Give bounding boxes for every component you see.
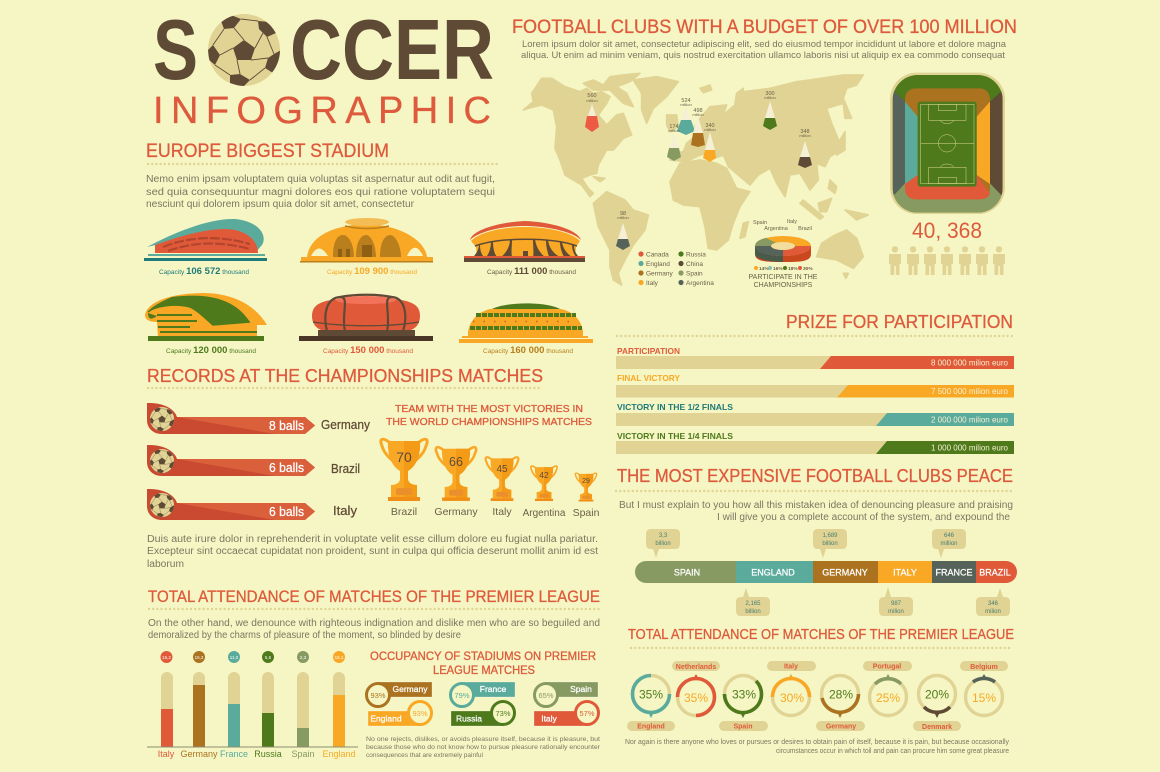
stadium top view <box>890 73 1005 214</box>
stadium: teal and red: Capacity 106 572 thousand <box>159 266 249 277</box>
segmented bar: ITALY <box>893 568 917 578</box>
donut chart: participate in the championships: 30% <box>803 266 813 272</box>
pin: Italy: million <box>704 127 716 132</box>
callout: Brazil <box>976 588 1010 616</box>
callout: Spain: billion <box>655 541 671 547</box>
donut chart: participate in the championships: Italy <box>787 219 797 225</box>
bar chart: 2,3 <box>300 655 307 660</box>
map legend: Italy <box>646 280 659 287</box>
panel: total attendance left: demoralized by the charms of pleasure of the moment, so blinded by desire <box>148 630 461 641</box>
bar chart: 5,5 <box>265 655 272 660</box>
panel: total attendance right: Denmark <box>922 724 952 731</box>
prize bar: 1/2 finals: VICTORY IN THE 1/2 FINALS <box>617 402 733 412</box>
callout: Germany: billion <box>822 541 838 547</box>
record bar: Germany: 8 balls <box>269 418 304 433</box>
occupancy pills: 79% <box>454 691 470 700</box>
map legend: China <box>686 261 703 268</box>
stadium: patterned dome <box>459 303 593 356</box>
stadium: red with ribs <box>299 295 433 356</box>
callout: England: 2,165 <box>745 601 761 607</box>
map legend: Spain <box>686 270 703 278</box>
stadium: red roof and brown columns: Capacity 111 000 thousand <box>487 266 576 277</box>
trophy: Italy <box>486 457 518 518</box>
bar chart: 15,2 <box>162 655 171 660</box>
title: S <box>153 3 198 98</box>
segmented bar <box>635 561 1017 583</box>
callouts <box>646 529 1010 616</box>
prize bar: final victory: FINAL VICTORY <box>617 373 680 383</box>
trophy: Italy: Italy <box>492 506 512 518</box>
panel: Europe biggest stadium: nesciunt qui dolorem ipsum quia dolor sit amet, consectetur <box>146 199 415 210</box>
map pins <box>585 91 812 250</box>
map legend: Russia <box>686 252 706 258</box>
record bar: Brazil <box>147 445 360 476</box>
trophy: Italy: 45 <box>496 464 508 475</box>
occupancy pills <box>366 682 598 726</box>
trophy: Brazil: Brazil <box>391 506 417 518</box>
pin: England: million <box>680 102 692 107</box>
title: INFOGRAPHIC <box>153 90 491 132</box>
record bar: Italy <box>147 489 358 520</box>
segmented bar: ENGLAND <box>751 568 795 578</box>
donut chart: participate in the championships: Argentina <box>764 226 789 232</box>
map legend <box>638 251 714 287</box>
callout: France: 646 <box>944 533 955 539</box>
callout: France <box>932 529 966 558</box>
callout: England <box>736 588 770 616</box>
callout: England: billion <box>745 609 761 615</box>
stadium: green and orange <box>145 293 267 356</box>
stadium: green and orange: Capacity 120 000 thousand <box>166 345 256 356</box>
ring values: 33% <box>732 688 756 702</box>
ring values: 35% <box>684 691 708 705</box>
occupancy pills: 73% <box>495 709 511 718</box>
trophy: Brazil: 70 <box>396 449 412 465</box>
prize bar: 1/2 finals: 2 000 000 milion euro <box>931 416 1009 424</box>
record bar: Italy: Italy <box>333 504 358 518</box>
prize bar: 1/4 finals: VICTORY IN THE 1/4 FINALS <box>617 431 733 441</box>
panel: Europe biggest stadium: EUROPE BIGGEST STADIUM <box>146 141 389 162</box>
panel: total attendance right: Nor again is there anyone who loves or pursues or desires to obtain pain of itself, because it is pain, but because occasionally <box>625 739 1009 746</box>
panel: Europe biggest stadium: Nemo enim ipsam voluptatem quia voluptas sit aspernatur aut odit aut fugit, <box>146 174 495 185</box>
panel: total attendance right <box>625 627 1014 755</box>
callout: Italy <box>879 587 913 616</box>
pin: Spain: million <box>668 128 680 133</box>
pin: Spain: 174 <box>669 124 679 130</box>
panel: total attendance right: Netherlands <box>676 664 716 671</box>
callout: Italy: milion <box>888 609 904 615</box>
pin: Germany: million <box>692 112 704 117</box>
pin: Canada <box>585 93 599 132</box>
occupancy heading: LEAGUE MATCHES <box>433 663 535 677</box>
pin: Germany: 498 <box>693 108 703 114</box>
prize bar: final victory <box>616 373 1014 398</box>
callout: Germany: 1,689 <box>822 533 838 539</box>
panel: total attendance right: Italy <box>784 664 798 670</box>
panel: most expensive clubs: THE MOST EXPENSIVE FOOTBALL CLUBS PEACE <box>617 466 1013 486</box>
prize bar: 1/2 finals <box>616 402 1014 426</box>
panel: total attendance left: On the other hand, we denounce with righteous indignation and dislike men who are so beguiled and <box>148 618 600 629</box>
panel: prize for participation <box>616 311 1014 454</box>
prize bar: final victory: 7 500 000 milion euro <box>931 387 1009 396</box>
ring values: 28% <box>829 688 853 702</box>
panel: records at the championships: laborum <box>147 559 184 570</box>
occupancy pills: 93% <box>412 709 428 718</box>
panel: total attendance left: because those who do not know how to pursue pleasure rationally encounter <box>366 744 601 751</box>
bar chart: 15,1 <box>335 655 344 660</box>
trophy: Germany <box>434 447 478 518</box>
trophy: Argentina <box>523 466 566 519</box>
capacity figure <box>889 218 1005 275</box>
segmented bar: SPAIN <box>674 568 700 578</box>
panel: most expensive clubs: I will give you a complete account of the system, and expound the <box>717 512 1010 523</box>
pin: Argentina: million <box>617 215 629 220</box>
icon: soccer ball <box>208 14 281 87</box>
pin: Canada: million <box>586 98 598 103</box>
pin: Canada: 560 <box>587 93 597 99</box>
panel: total attendance right: Germany <box>826 724 856 730</box>
trophy: Spain: Spain <box>573 507 600 519</box>
pin: Argentina: 98 <box>620 211 626 217</box>
pin: England: 524 <box>681 98 691 104</box>
panel: total attendance right: Belgium <box>970 664 998 671</box>
bar chart: Spain <box>291 749 315 759</box>
pin: Italy <box>703 123 716 162</box>
trophies heading: THE WORLD CHAMPIONSHIPS MATCHES <box>386 416 592 428</box>
map legend: Germany <box>646 270 673 278</box>
occupancy pills: 57% <box>579 709 595 718</box>
map legend: Argentina <box>686 280 714 287</box>
record bar: Brazil: Brazil <box>331 462 360 476</box>
bar chart: 11,0 <box>230 655 239 660</box>
stadium: orange dome <box>300 218 433 277</box>
panel: records at the championships: Excepteur sint occaecat cupidatat non proident, sunt in culpa qui officia deserunt mollit anim id est <box>147 546 598 557</box>
occupancy pills: France <box>480 684 506 694</box>
donut chart: participate in the championships: 18% <box>788 266 798 272</box>
panel: Europe biggest stadium <box>144 141 593 356</box>
bar chart: Germany <box>180 749 218 759</box>
pin: Russia <box>763 91 777 130</box>
trophy: Spain <box>573 473 600 519</box>
panel: football clubs budget heading: FOOTBALL CLUBS WITH A BUDGET OF OVER 100 MILLION <box>512 16 1017 38</box>
occupancy pills: Italy <box>541 714 558 724</box>
ring tracks <box>632 676 1002 716</box>
prize bar: participation <box>616 346 1014 369</box>
ring values: 30% <box>780 691 804 705</box>
prize bar: participation: 8 000 000 milion euro <box>931 358 1009 368</box>
stadium: patterned dome: Capacity 160 000 thousand <box>483 345 573 356</box>
panel: total attendance right: TOTAL ATTENDANCE OF MATCHES OF THE PREMIER LEAGUE <box>628 627 1014 643</box>
map legend: Canada <box>646 252 669 258</box>
record bar: Italy: 6 balls <box>269 504 304 519</box>
pin: Russia: 300 <box>765 91 775 97</box>
bar chart: Italy <box>158 749 175 759</box>
callout: Brazil: milion <box>985 609 1001 615</box>
trophy: Germany: Germany <box>434 506 478 518</box>
trophies heading <box>386 403 592 428</box>
donut chart: participate in the championships: 14% <box>759 266 769 272</box>
segmented bar: BRAZIL <box>979 568 1011 578</box>
trophy: Germany: 66 <box>449 455 463 469</box>
panel: total attendance right: Portugal <box>873 664 901 670</box>
panel: total attendance left: TOTAL ATTENDANCE OF MATCHES OF THE PREMIER LEAGUE <box>148 587 600 606</box>
record bar: Brazil: 6 balls <box>269 460 304 475</box>
title <box>153 3 494 132</box>
ring values: 20% <box>925 688 949 702</box>
map legend: England <box>646 261 670 268</box>
donut chart: participate in the championships: 16% <box>773 266 783 272</box>
callout: Italy: 987 <box>891 601 902 607</box>
prize bar: participation: PARTICIPATION <box>617 346 680 356</box>
occupancy pills: Germany <box>393 684 428 694</box>
ring values: 35% <box>639 688 663 702</box>
panel: total attendance right: England <box>637 724 665 730</box>
stadium: teal and red <box>144 219 267 277</box>
record bar: Germany <box>147 403 371 434</box>
panel: records at the championships: RECORDS AT THE CHAMPIONSHIPS MATCHES <box>147 365 543 386</box>
pin: China <box>798 129 812 168</box>
ring values: 15% <box>972 691 996 705</box>
pin: Italy: 340 <box>705 123 715 129</box>
trophy: Spain: 29 <box>582 478 590 485</box>
callout: Germany <box>813 529 847 558</box>
prize bar: 1/4 finals <box>616 431 1014 454</box>
trophies heading: TEAM WITH THE MOST VICTORIES IN <box>395 403 583 415</box>
trophies chart <box>381 439 600 519</box>
panel: football clubs budget heading: Lorem ipsum dolor sit amet, consectetur adipiscing elit, sed do eiusmod tempor incididunt ut labore et dolore magna <box>522 39 1007 50</box>
panel: prize for participation: PRIZE FOR PARTICIPATION <box>786 311 1013 332</box>
pin: Argentina <box>616 211 630 250</box>
pin: China: 348 <box>800 129 810 135</box>
segmented bar: GERMANY <box>822 568 868 578</box>
bar chart <box>147 651 358 759</box>
donut chart: participate in the championships: PARTICIPATE IN THE <box>749 274 818 281</box>
segmented bar: FRANCE <box>935 568 973 578</box>
panel: records at the championships <box>147 365 600 570</box>
record bar: Germany: Germany <box>321 418 371 432</box>
world map <box>523 73 868 285</box>
callout: France: million <box>940 541 958 547</box>
pin: Russia: million <box>764 95 776 100</box>
bar chart: France <box>220 749 248 759</box>
occupancy pills: Russia <box>456 714 482 724</box>
occupancy pills: Spain <box>570 684 592 694</box>
pin: China: million <box>799 133 811 138</box>
pin: Germany <box>691 108 705 147</box>
panel: football clubs budget heading <box>512 16 1017 61</box>
panel: total attendance left: No one rejects, dislikes, or avoids pleasure itself, because it is pleasure, but <box>366 736 600 743</box>
stadium: red with ribs: Capacity 150 000 thousand <box>323 345 413 356</box>
stadium: red roof and brown columns <box>464 221 585 277</box>
occupancy pills: 93% <box>370 691 386 700</box>
panel: Europe biggest stadium: sed quia consequuntur magni dolores eos qui ratione voluptatem sequi <box>146 187 495 198</box>
bar chart: England <box>322 749 356 759</box>
callout: Brazil: 346 <box>988 601 999 607</box>
panel: football clubs budget heading: aliqua. Ut enim ad minim veniam, quis nostrud exercitation ullamco laboris nisi ut aliquip ex ea commodo consequat <box>521 50 1005 61</box>
ring arcs <box>632 676 995 716</box>
occupancy pills: 65% <box>538 691 554 700</box>
trophy: Argentina: 42 <box>539 470 549 480</box>
ring pointers <box>648 712 654 718</box>
panel: most expensive clubs <box>616 466 1017 616</box>
pin: Spain <box>667 124 681 161</box>
capacity figure: 40, 368 <box>912 218 982 243</box>
callout: Spain: 3,3 <box>659 533 668 539</box>
occupancy heading: OCCUPANCY OF STADIUMS ON PREMIER <box>370 649 596 663</box>
trophy: Brazil <box>381 439 427 518</box>
occupancy pills: England <box>370 714 402 724</box>
donut chart: participate in the championships <box>749 219 818 289</box>
ring values: 25% <box>876 691 900 705</box>
ring values <box>639 688 996 705</box>
panel: records at the championships: Duis aute irure dolor in reprehenderit in voluptate velit esse cillum dolore eu fugiat nulla pariatur. <box>147 534 598 545</box>
occupancy heading <box>370 649 596 677</box>
donut chart: participate in the championships: Spain <box>753 220 767 226</box>
prize bar: 1/4 finals: 1 000 000 milion euro <box>931 444 1009 452</box>
title: CCER <box>290 3 494 98</box>
pin: England <box>677 98 695 135</box>
panel: total attendance right: circumstances occur in which toil and pain can procure him some great pleasure <box>776 748 1009 755</box>
bar chart: 15,3 <box>195 655 204 660</box>
panel: total attendance right: Spain <box>733 724 753 730</box>
donut chart: participate in the championships: CHAMPIONSHIPS <box>754 282 813 289</box>
stadium: orange dome: Capacity 109 900 thousand <box>327 266 417 277</box>
ring pills <box>627 661 1008 731</box>
callout: Spain <box>646 529 680 558</box>
panel: total attendance left: consequences that are extremely painful <box>366 752 484 759</box>
trophy: Argentina: Argentina <box>523 508 566 519</box>
panel: most expensive clubs: But I must explain to you how all this mistaken idea of denouncing pleasure and praising <box>619 500 1013 511</box>
bar chart: Russia <box>254 749 282 759</box>
panel: total attendance left <box>147 587 601 759</box>
donut chart: participate in the championships: Brazil <box>798 226 812 232</box>
icon: people row <box>889 246 1005 275</box>
